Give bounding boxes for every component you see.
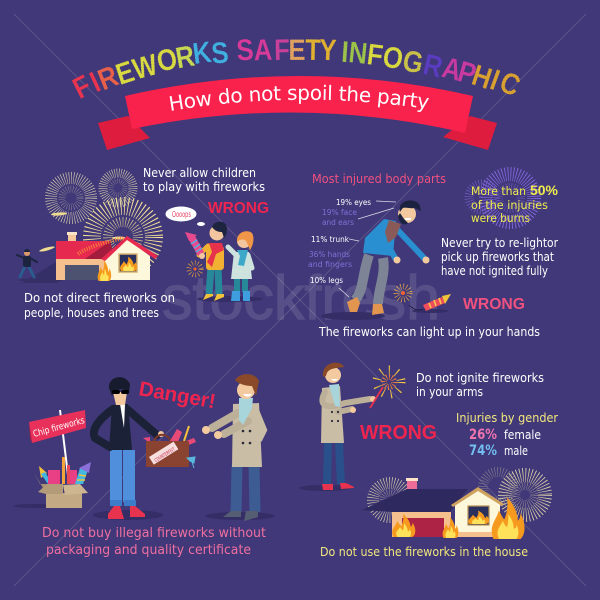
sparkler — [370, 370, 401, 408]
heading: most injured: Most injured body parts — [312, 172, 446, 186]
title: I — [340, 35, 350, 69]
man with beige coat — [202, 374, 275, 521]
title: R — [173, 39, 197, 75]
text: never allow children: to play with fireworks — [143, 180, 265, 194]
villain figure — [93, 377, 164, 520]
firework burst small left — [51, 178, 91, 218]
injured man figure — [321, 200, 430, 320]
stat: injuries by gender — [456, 411, 558, 459]
stat: 50 percent burns: More than — [471, 184, 526, 198]
title: R — [420, 48, 446, 84]
panel: children with fireworks — [143, 166, 269, 302]
rocket on ground — [409, 294, 451, 313]
title: I — [85, 65, 105, 98]
panel: illegal fireworks — [13, 374, 275, 558]
title: I — [486, 63, 504, 97]
stat: injuries by gender: Injuries by gender — [456, 411, 558, 425]
title — [67, 33, 525, 105]
stat: injuries by gender: 26% — [469, 427, 497, 443]
stat: injuries by gender: female — [504, 428, 541, 442]
stat: 50 percent burns — [471, 183, 558, 225]
chip fireworks sign: Chip fireworks — [32, 415, 86, 440]
spark — [396, 286, 410, 300]
counterfeit briefcase — [143, 426, 196, 468]
title: R — [93, 59, 123, 97]
text: never re-light — [441, 236, 558, 278]
burning house — [362, 478, 525, 539]
title: F — [67, 68, 96, 105]
text: do not ignite: Do not ignite fireworks — [416, 371, 544, 385]
title: F — [274, 33, 290, 67]
title: E — [288, 33, 306, 66]
girl — [228, 231, 253, 301]
boy — [199, 222, 227, 301]
body part labels — [308, 197, 371, 285]
watermark: stockfresh — [162, 264, 440, 333]
text: do not ignite: in your arms — [416, 385, 483, 399]
firework burst small top — [103, 173, 133, 203]
title: W — [129, 47, 162, 86]
firework box — [13, 457, 91, 508]
title: K — [191, 35, 213, 70]
title: S — [210, 36, 230, 70]
chip fireworks sign — [29, 410, 86, 475]
panel: do not use fireworks in the house — [320, 472, 545, 559]
text: illegal fireworks warning: Do not buy illegal fireworks without — [42, 526, 266, 541]
body part labels: 19% eyes — [336, 197, 371, 207]
stat: injuries by gender: 74% — [469, 443, 497, 459]
panel: do not ignite in your arms — [299, 363, 558, 491]
text: do not ignite — [416, 371, 544, 399]
text: never allow children — [143, 166, 265, 194]
body part labels: 19% face — [322, 207, 357, 217]
man with sparkler — [299, 363, 376, 491]
title: A — [439, 50, 465, 87]
burst behind stat — [469, 174, 534, 222]
ribbon banner — [98, 76, 497, 150]
stat: injuries by gender: male — [504, 444, 528, 458]
body part labels: and ears — [322, 217, 354, 227]
danger label: Danger! — [137, 377, 217, 413]
wrong label: WRONG — [208, 200, 269, 217]
text: light up in hands: The fireworks can light up in your hands — [318, 325, 540, 339]
text: illegal fireworks warning: packaging and quality certificate — [46, 543, 251, 558]
text: direct fireworks warning: people, houses and trees — [24, 306, 159, 320]
title: S — [235, 33, 255, 67]
title: O — [154, 41, 180, 78]
title: T — [305, 33, 321, 67]
body part labels: 11% trunk — [311, 234, 349, 244]
speech bubble: Oooops — [172, 210, 191, 219]
title: P — [454, 54, 480, 91]
panel: most injured body parts — [308, 172, 558, 339]
stat: 50 percent burns: were burns — [471, 211, 530, 225]
body part labels: 10% legs — [310, 275, 343, 285]
counterfeit briefcase: COUNTERFEIT — [154, 446, 177, 464]
text: never re-light: pick up fireworks that — [441, 250, 554, 264]
text: never re-light: have not ignited fully — [441, 264, 548, 278]
shadow — [197, 296, 263, 302]
title: E — [112, 54, 138, 91]
title: N — [347, 35, 369, 70]
small running man — [17, 249, 41, 282]
text: in the house: Do not use the fireworks in the house — [320, 545, 528, 559]
panel: do not direct fireworks at houses — [17, 173, 175, 320]
title: F — [365, 37, 385, 72]
house burning — [22, 232, 158, 283]
firework bursts — [373, 472, 545, 517]
body part labels: and fingers — [308, 259, 352, 269]
shooting sparks — [39, 212, 126, 253]
title: C — [495, 65, 525, 103]
title: G — [400, 44, 426, 80]
text: illegal fireworks warning — [42, 526, 266, 558]
title: Y — [319, 33, 337, 67]
rocket in hand — [185, 232, 205, 259]
title: H — [468, 58, 496, 96]
title: A — [253, 33, 273, 67]
fuse spark — [189, 263, 201, 275]
text: never re-light: Never try to re-lightor — [441, 236, 558, 250]
text: direct fireworks warning — [24, 291, 175, 320]
text: direct fireworks warning: Do not direct fireworks on — [24, 291, 175, 305]
wrong label: WRONG — [360, 422, 437, 444]
stat: 50 percent burns: of the injuries — [471, 198, 548, 212]
text: never allow children: Never allow children — [143, 166, 256, 180]
wrong label: WRONG — [463, 296, 525, 313]
stat: 50 percent burns: 50% — [530, 183, 558, 198]
title: O — [381, 40, 406, 76]
ribbon subtitle: How do not spoil the party — [170, 84, 429, 112]
body part labels: 36% hands — [309, 249, 350, 259]
firework burst large — [92, 206, 154, 268]
